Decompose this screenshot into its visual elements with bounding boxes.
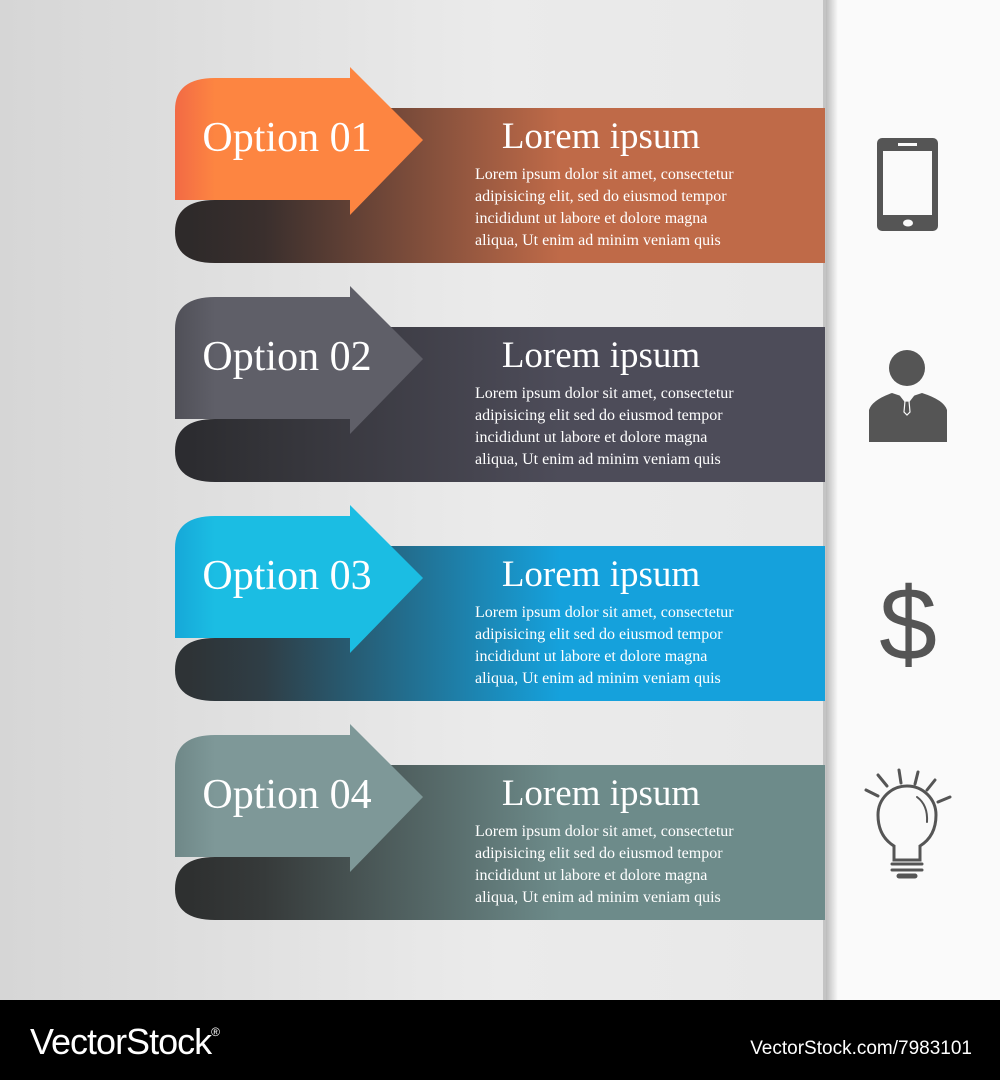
ribbon: option 01: Lorem ipsum dolor sit amet, consectetur [475,166,734,183]
ribbon: option 01 [175,67,825,263]
ribbon: option 04 [175,724,825,920]
ribbon: option 04: Lorem ipsum dolor sit amet, consectetur [475,823,734,840]
ribbon: option 04: Option 04 [202,772,372,818]
ribbon: option 02: incididunt ut labore et dolore magna [475,429,707,446]
ribbon: option 01: adipisicing elit, sed do eiusmod tempor [475,188,727,205]
ribbon: option 03: Option 03 [202,553,372,599]
ribbon: option 02: Lorem ipsum dolor sit amet, consectetur [475,385,734,402]
ribbon: option 03: incididunt ut labore et dolore magna [475,648,707,665]
icon: dollar: $ [879,567,937,683]
ribbon: option 01: Lorem ipsum [502,116,700,157]
ribbon: option 02: Option 02 [202,334,372,380]
ribbon: option 04: adipisicing elit sed do eiusmod tempor [475,845,723,862]
ribbon: option 02 [175,286,825,482]
ribbon: option 03: aliqua, Ut enim ad minim veniam quis [475,670,721,687]
footer bar: VectorStock [30,1021,211,1062]
footer bar: VectorStock.com/7983101 [750,1038,972,1059]
ribbon: option 01: Option 01 [202,115,372,161]
ribbon: option 03 [175,505,825,701]
ribbon: option 03: adipisicing elit sed do eiusmod tempor [475,626,723,643]
ribbon: option 02: aliqua, Ut enim ad minim veniam quis [475,451,721,468]
footer bar: ® [211,1025,220,1039]
ribbon: option 02: adipisicing elit sed do eiusmod tempor [475,407,723,424]
footer bar [0,1000,1000,1080]
ribbon: option 04: Lorem ipsum [502,773,700,814]
ribbon: option 04: incididunt ut labore et dolore magna [475,867,707,884]
ribbon: option 03: Lorem ipsum dolor sit amet, consectetur [475,604,734,621]
ribbon: option 02: Lorem ipsum [502,335,700,376]
icon: light bulb [866,770,950,876]
icon: phone [877,138,938,231]
ribbon: option 03: Lorem ipsum [502,554,700,595]
ribbon: option 01: aliqua, Ut enim ad minim veniam quis [475,232,721,249]
icon: person [869,350,947,442]
ribbon: option 01: incididunt ut labore et dolore magna [475,210,707,227]
ribbon: option 04: aliqua, Ut enim ad minim veniam quis [475,889,721,906]
